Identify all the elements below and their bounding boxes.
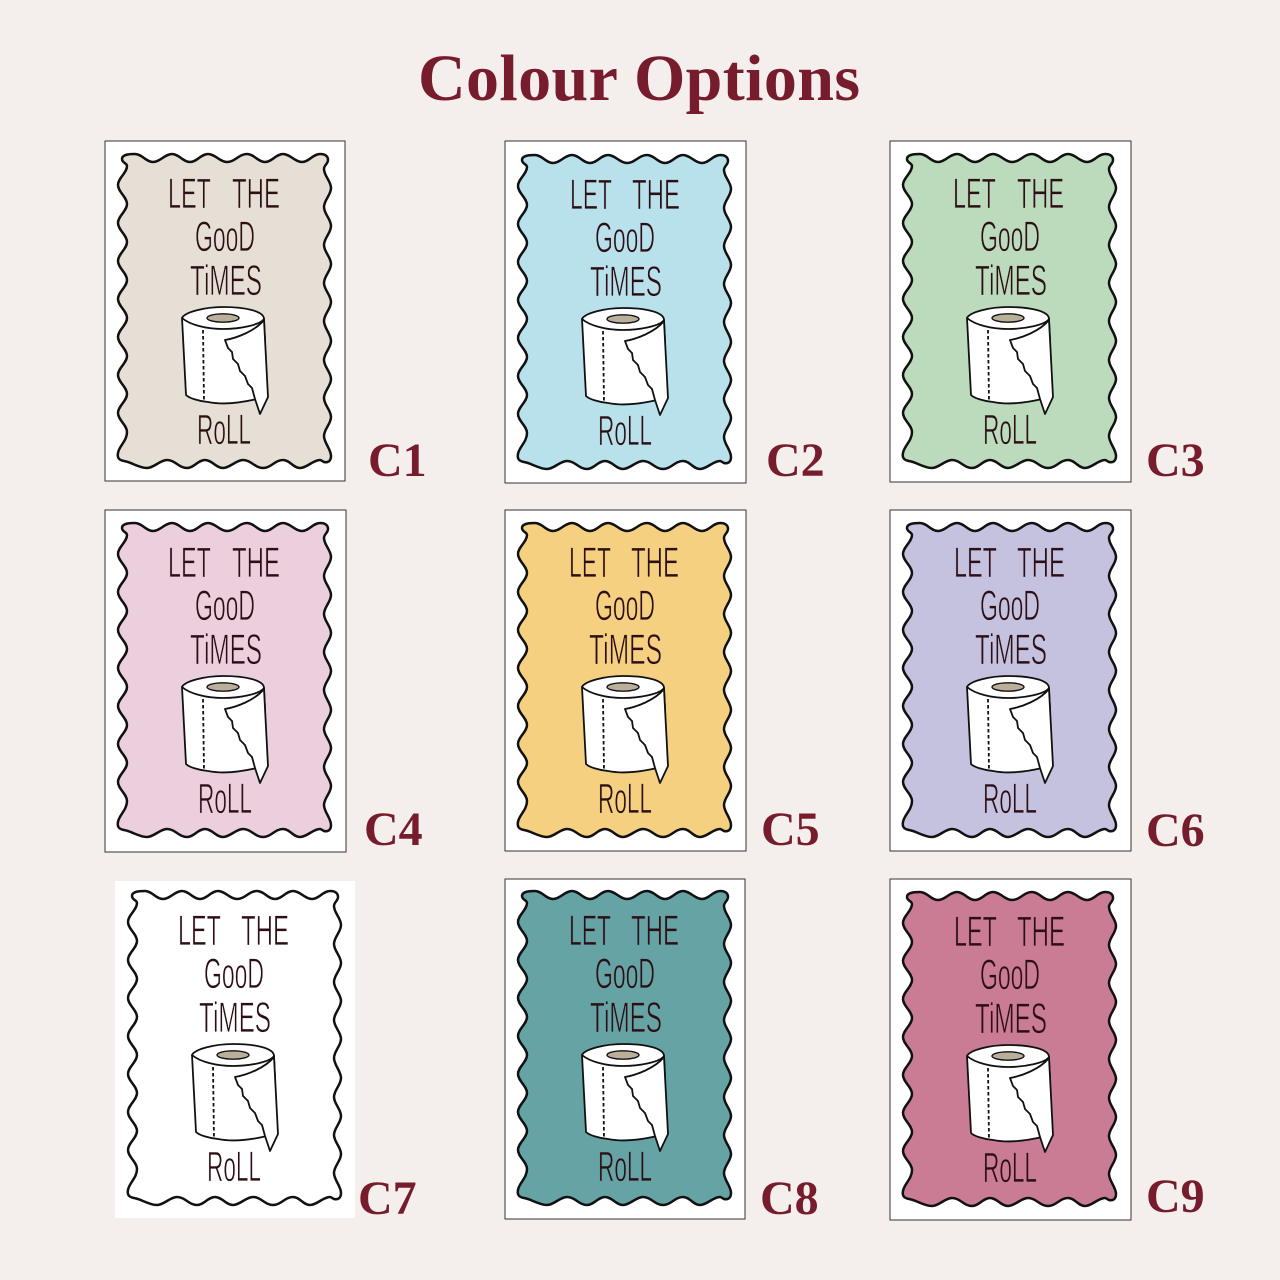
wavy frame [903, 154, 1116, 468]
poster text: GooD [980, 951, 1040, 999]
card background [115, 881, 355, 1218]
poster text [954, 908, 1065, 1192]
poster text [569, 539, 679, 823]
icon: toilet roll [582, 676, 668, 783]
poster text: GooD [980, 582, 1040, 630]
poster text: THE [632, 171, 680, 219]
poster text: LET [569, 539, 611, 587]
label C9: C9 [1146, 1170, 1205, 1223]
label C6: C6 [1146, 804, 1205, 857]
wavy frame [903, 523, 1116, 837]
label C3: C3 [1146, 434, 1205, 487]
card: colour option C5 yellow [505, 510, 746, 851]
poster text: GooD [595, 950, 655, 998]
label C2: C2 [766, 434, 825, 487]
card: colour option C9 rose [890, 879, 1131, 1220]
poster text: GooD [980, 213, 1040, 261]
card background [505, 141, 746, 483]
card: colour option C2 light blue [505, 141, 746, 483]
poster text: RoLL [598, 1143, 652, 1191]
poster text [569, 907, 679, 1191]
poster text: RoLL [197, 406, 251, 454]
icon: toilet roll [582, 1044, 668, 1151]
poster text: THE [232, 170, 280, 218]
poster text: TiMES [590, 258, 662, 306]
label C8: C8 [760, 1172, 819, 1225]
poster text: RoLL [598, 407, 652, 455]
icon: toilet roll [582, 308, 668, 415]
poster text: RoLL [983, 406, 1037, 454]
card: colour option C8 teal [505, 879, 745, 1219]
wavy frame [518, 155, 731, 469]
card background [890, 879, 1131, 1220]
card: colour option C1 beige [105, 141, 345, 481]
wavy frame [118, 154, 331, 468]
label C1: C1 [368, 434, 427, 487]
poster text: THE [232, 539, 280, 587]
poster text: TiMES [975, 995, 1047, 1043]
wavy frame [518, 523, 731, 837]
icon: toilet roll [192, 1044, 278, 1151]
poster text: RoLL [598, 775, 652, 823]
icon: toilet roll [967, 676, 1053, 783]
label C4: C4 [364, 803, 423, 856]
poster text: TiMES [975, 257, 1047, 305]
poster text: TiMES [190, 257, 262, 305]
poster text: LET [954, 908, 997, 956]
card background [505, 510, 746, 851]
card background [105, 510, 346, 852]
poster text [570, 171, 680, 455]
card: colour option C6 lavender [890, 510, 1131, 851]
card background [890, 510, 1131, 851]
title: Colour Options [418, 42, 860, 115]
poster text: GooD [204, 950, 264, 998]
wavy frame [128, 891, 341, 1205]
poster text: RoLL [207, 1143, 261, 1191]
poster text: LET [953, 170, 996, 218]
poster text: GooD [595, 214, 655, 262]
poster text: LET [168, 539, 211, 587]
poster text: GooD [595, 582, 655, 630]
poster text: LET [168, 170, 211, 218]
poster text: TiMES [190, 626, 262, 674]
poster text: RoLL [198, 775, 252, 823]
poster text [953, 170, 1064, 454]
poster text: TiMES [199, 994, 271, 1042]
card background [890, 141, 1131, 482]
poster text: GooD [195, 582, 255, 630]
icon: toilet roll [967, 1045, 1053, 1152]
poster text: THE [241, 907, 289, 955]
poster text: TiMES [590, 994, 662, 1042]
poster text [168, 170, 280, 454]
label C5: C5 [761, 803, 820, 856]
poster text: RoLL [983, 1144, 1037, 1192]
poster text: THE [1017, 539, 1065, 587]
icon: toilet roll [182, 307, 268, 414]
poster text: LET [570, 171, 612, 219]
wavy frame [118, 523, 331, 837]
poster text: TiMES [975, 626, 1047, 674]
poster text: LET [569, 907, 611, 955]
card: colour option C7 white [115, 881, 355, 1218]
poster text: LET [954, 539, 997, 587]
label C7: C7 [358, 1172, 417, 1225]
poster text [178, 907, 289, 1191]
poster text [954, 539, 1065, 823]
icon: toilet roll [967, 307, 1053, 414]
poster text [168, 539, 280, 823]
wavy frame [518, 891, 731, 1205]
wavy frame [903, 892, 1116, 1206]
poster text: TiMES [589, 626, 662, 674]
poster text: LET [178, 907, 221, 955]
poster text: THE [1017, 908, 1065, 956]
card background [505, 879, 745, 1219]
poster text: THE [631, 907, 679, 955]
card: colour option C4 pink [105, 510, 346, 852]
poster text: GooD [195, 213, 255, 261]
poster text: THE [631, 539, 679, 587]
card background [105, 141, 345, 481]
poster text: THE [1017, 170, 1064, 218]
card: colour option C3 green [890, 141, 1131, 482]
poster text: RoLL [983, 775, 1037, 823]
icon: toilet roll [182, 676, 268, 783]
